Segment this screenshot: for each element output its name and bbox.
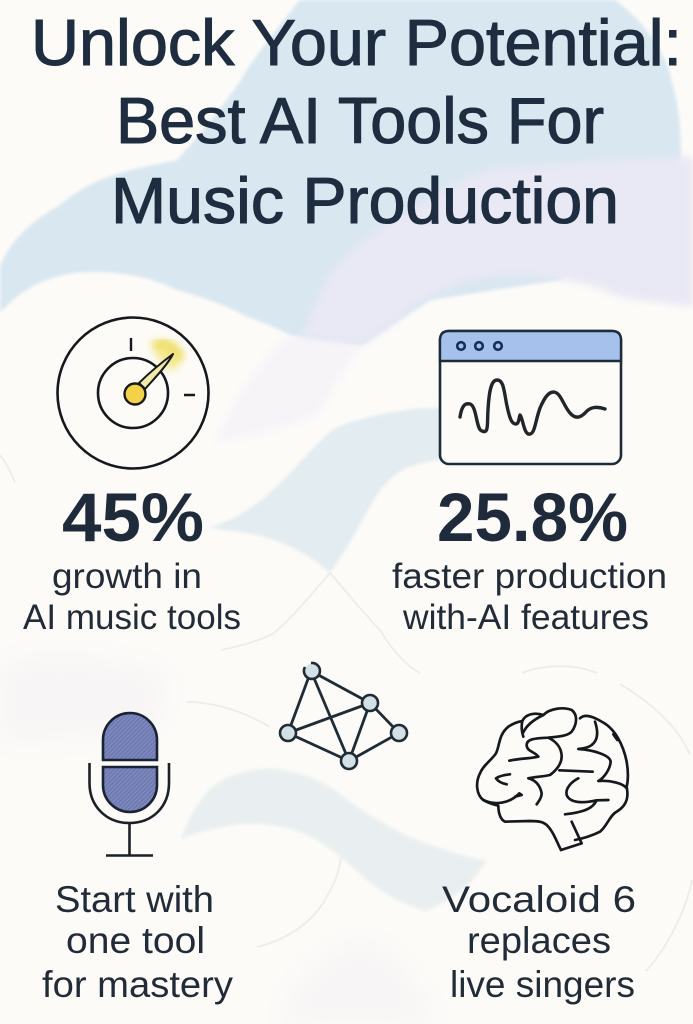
background: faint patches	[0, 660, 435, 1024]
icon: brain	[477, 708, 628, 850]
title	[31, 6, 682, 237]
caption: Vocaloid 6 replaces live singers: live singers	[450, 964, 635, 1005]
stat: 25.8%: 25.8%	[437, 479, 628, 556]
caption: Vocaloid 6 replaces live singers: replaces	[467, 920, 611, 961]
stat caption: growth in AI music tools	[23, 557, 241, 637]
background: lavender wash	[300, 157, 693, 345]
stat: 45%: 45%	[62, 479, 204, 556]
caption: Start with one tool for mastery: for mastery	[42, 964, 234, 1005]
background: faint lavender lower wash	[215, 335, 362, 442]
gauge glow	[150, 340, 183, 369]
icon: microphone	[90, 713, 169, 856]
title: Best AI Tools For	[116, 84, 604, 157]
caption: Vocaloid 6 replaces live singers: Vocaloid 6	[442, 879, 636, 920]
caption: Start with one tool for mastery	[42, 879, 234, 1005]
background: thin flowing lines	[0, 455, 692, 971]
icon: network graph	[280, 663, 407, 769]
title: Music Production	[111, 164, 619, 237]
stat caption: faster production with-AI features: with-AI features	[402, 598, 649, 637]
background: middle blue wedge	[208, 408, 445, 573]
background: top blue wave	[0, 0, 681, 345]
stat caption: growth in AI music tools: growth in	[52, 557, 202, 596]
title: Unlock Your Potential:	[31, 6, 682, 79]
icon: speedometer gauge	[58, 318, 208, 468]
background: lower blue wedge	[181, 769, 487, 911]
stat caption: faster production with-AI features	[392, 557, 667, 637]
stat caption: growth in AI music tools: AI music tools	[23, 598, 241, 637]
icon: app window with waveform	[440, 331, 621, 464]
caption: Vocaloid 6 replaces live singers	[442, 879, 636, 1005]
caption: Start with one tool for mastery: one tool	[66, 920, 205, 961]
caption: Start with one tool for mastery: Start with	[55, 879, 214, 920]
stat caption: faster production with-AI features: faster production	[392, 557, 667, 596]
